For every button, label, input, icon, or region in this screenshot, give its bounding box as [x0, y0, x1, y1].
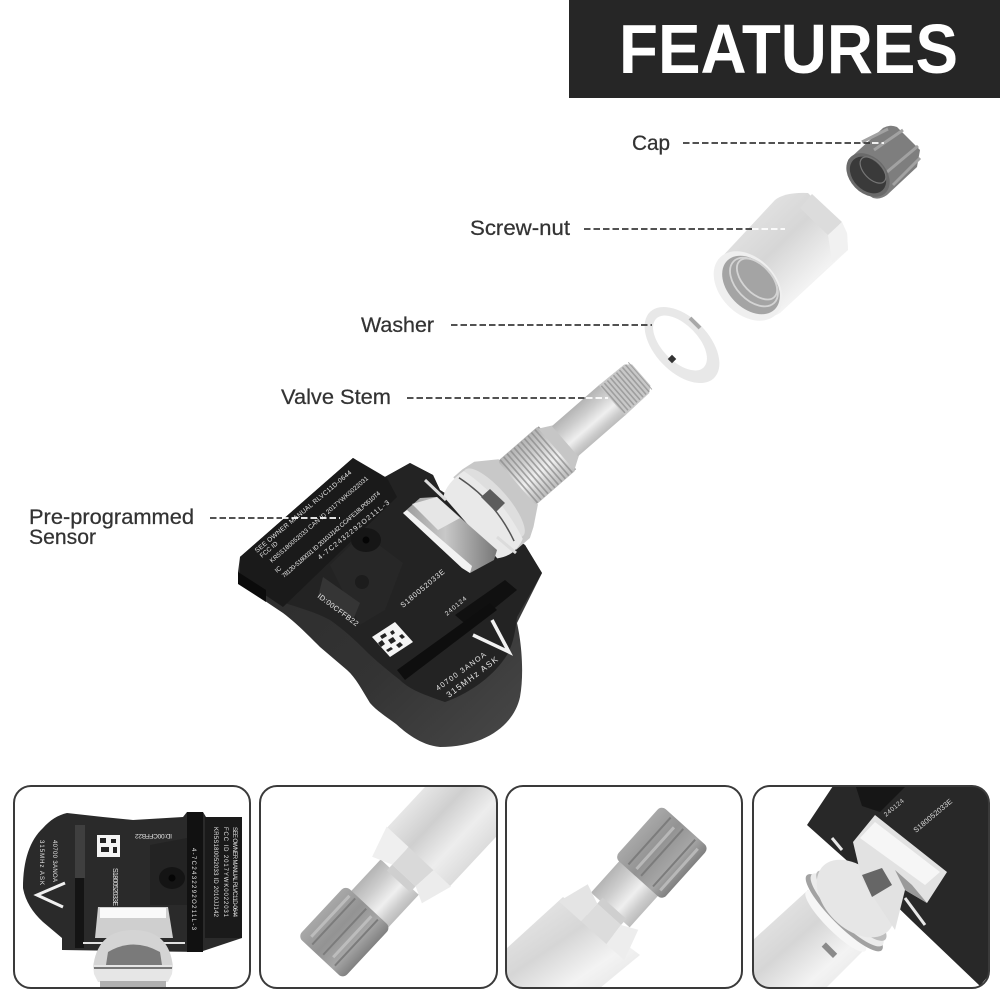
flange	[453, 447, 551, 550]
panel: sensor hub close-up	[753, 786, 989, 988]
sensor markings: SEE OWNER MANUAL RLVC11D-0644	[254, 469, 354, 555]
label: Screw-nut: Screw-nut	[470, 217, 570, 240]
panel: sensor back view: ID:00CFFB22	[135, 832, 172, 839]
panel: sensor back view: SEE OWNER MANUAL RLVC11D-0644	[231, 827, 237, 918]
sensor markings	[254, 469, 500, 700]
washer	[631, 293, 733, 397]
pre-programmed sensor	[238, 458, 542, 747]
recess	[330, 533, 403, 625]
hex	[372, 827, 408, 864]
nut body	[388, 787, 496, 886]
panel: sensor back view: S180052033E	[111, 868, 118, 906]
cap body	[615, 805, 709, 900]
nut body	[506, 897, 640, 988]
sensor markings: 240124	[444, 595, 469, 618]
hex	[564, 884, 597, 921]
title banner	[569, 0, 1000, 98]
threaded core	[481, 489, 505, 512]
sensor markings: ID:00CFFB22	[316, 591, 360, 628]
panel: sensor back view: FCC ID 2017YWK0022031	[222, 827, 228, 918]
panel: nut and cap detail left	[259, 785, 498, 989]
panel: nut and cap detail right	[506, 786, 742, 988]
label: Pre-programmed Sensor: Sensor	[29, 526, 96, 549]
panel: sensor back view: 40700 3ANOA	[51, 840, 57, 882]
hub stem	[753, 890, 866, 988]
label: Washer: Washer	[361, 314, 434, 337]
wide thread	[498, 426, 576, 505]
panel: sensor hub close-up: S180052033E	[912, 797, 954, 835]
neck	[349, 859, 419, 928]
panel: sensor hub close-up: 240124	[883, 797, 906, 819]
cap body	[298, 885, 391, 979]
metal block	[403, 497, 497, 573]
label: Valve Stem: Valve Stem	[281, 386, 391, 409]
sensor markings: KR5S180052033 CAN ID 2017YWK0022031	[269, 475, 370, 565]
shaft	[552, 384, 626, 456]
sensor markings: 4-7C2432292O211L-3	[317, 499, 391, 562]
V mark	[473, 620, 509, 652]
threaded core	[862, 868, 892, 897]
black housing	[807, 786, 989, 986]
label: Pre-programmed Sensor: Pre-programmed	[29, 506, 194, 529]
metal block	[853, 815, 947, 930]
clips	[425, 480, 516, 553]
label: Pre-programmed Sensor	[29, 506, 340, 549]
panel: sensor back view	[14, 786, 250, 988]
sensor markings: IC	[274, 565, 283, 575]
sensor markings: S180052033E	[399, 567, 446, 610]
screw-nut	[700, 193, 848, 334]
label: Cap: Cap	[632, 132, 670, 155]
centre boss	[351, 528, 381, 552]
sensor markings: 40700 3ANOA	[434, 650, 488, 693]
sensor markings: FCC ID	[259, 540, 280, 560]
sensor body	[238, 458, 542, 747]
cup	[439, 467, 530, 563]
neck	[591, 858, 660, 927]
tip thread	[599, 360, 654, 416]
label plate	[240, 458, 397, 607]
valve stem	[403, 340, 674, 573]
data matrix code	[372, 622, 413, 657]
sensor markings: 78120-S180031 ID 2010JJ142 CCAFE18LP0510T4	[281, 490, 382, 580]
title banner: FEATURES	[619, 10, 958, 88]
panel: sensor back view: 4-7C2432292O211L-3	[190, 848, 196, 931]
top face	[240, 458, 542, 702]
panel: sensor back view: KR5S180052033 ID 2010JJ142	[212, 827, 218, 918]
panel: sensor back view: 315MHz ASK	[38, 840, 44, 885]
cap	[838, 126, 920, 205]
bracket rail	[455, 580, 517, 628]
sensor markings: 315MHz ASK	[444, 654, 500, 700]
